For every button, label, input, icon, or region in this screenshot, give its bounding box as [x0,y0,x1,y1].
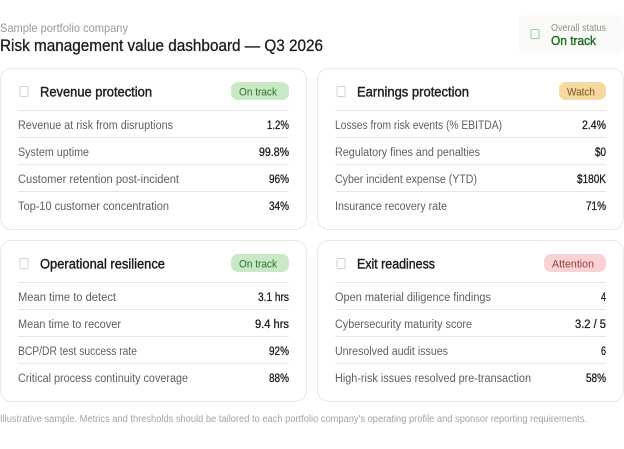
metric row: 1.2% [267,120,289,132]
badge: on track [231,254,289,272]
badge: watch [559,82,606,100]
metric row: High-risk issues resolved pre-transaction [335,373,531,385]
metric row: Unresolved audit issues [335,346,448,358]
heading: revenue protection: Revenue protection [40,84,152,100]
metric row: 58% [586,373,606,385]
badge: on track: On track [239,86,277,98]
status label: Overall status [551,22,606,34]
metric row [335,174,606,186]
metric row: Customer retention post-incident [18,174,180,186]
metric row [335,147,606,159]
icon: operations [20,258,28,268]
badge: attention [544,254,606,272]
icon: exit [337,258,345,268]
title: Risk management value dashboard — Q3 2026 [0,37,323,55]
metric row: 3.1 hrs [258,292,289,304]
badge: on track [231,82,289,100]
metric row: 6 [601,346,606,358]
metric row [18,292,289,304]
metric row [335,319,606,331]
metric row: 34% [269,201,289,213]
metric row: Regulatory fines and penalties [335,147,480,159]
metric row: 88% [269,373,289,385]
badge: watch: Watch [567,86,595,98]
metric row [18,373,289,385]
metric row: Insurance recovery rate [335,201,447,213]
metric row: 99.8% [259,147,289,159]
icon: status [531,30,539,38]
status value: On track [551,34,597,48]
metric row [335,346,606,358]
metric row: BCP/DR test success rate [18,346,137,358]
footnote: Illustrative sample. Metrics and thresholds should be tailored to each portfolio company's operating profile and sponsor reporting requirements. [0,414,587,425]
heading: exit readiness: Exit readiness [357,256,435,272]
metric row [335,292,606,304]
metric row: 71% [586,201,606,213]
badge: on track: On track [239,258,277,270]
metric row [18,346,289,358]
metric row: Open material diligence findings [335,292,491,304]
metric row: System uptime [18,147,89,159]
panel: revenue protection [0,68,306,230]
panel: exit readiness [318,240,624,402]
metric row [18,120,289,132]
metric row [335,120,606,132]
metric row: Mean time to detect [18,292,117,304]
metric row: Cybersecurity maturity score [335,319,472,331]
metric row [18,319,289,331]
metric row: 3.2 / 5 [575,319,606,331]
panel: operational resilience [0,240,306,402]
metric row: 4 [601,292,606,304]
metric row [18,174,289,186]
metric row: Cyber incident expense (YTD) [335,174,477,186]
heading: earnings protection: Earnings protection [357,84,469,100]
metric row: 2.4% [582,120,606,132]
metric row: Critical process continuity coverage [18,373,188,385]
metric row: 9.4 hrs [255,319,289,331]
metric row: Top-10 customer concentration [18,201,169,213]
panel: earnings protection [318,68,624,230]
metric row: Losses from risk events (% EBITDA) [335,120,502,132]
metric row: 92% [269,346,289,358]
overall status card [518,15,624,53]
badge: attention: Attention [552,258,594,270]
icon: revenue [20,86,28,96]
metric row [18,147,289,159]
metric row: $0 [595,147,606,159]
header: eyebrow: Sample portfolio company [0,21,128,35]
metric row: $180K [577,174,606,186]
metric row: 96% [269,174,289,186]
icon: earnings [337,86,345,96]
metric row: Mean time to recover [18,319,121,331]
metric row: Revenue at risk from disruptions [18,120,173,132]
heading: operational resilience: Operational resilience [40,256,165,272]
metric row [335,201,606,213]
metric row [18,201,289,213]
